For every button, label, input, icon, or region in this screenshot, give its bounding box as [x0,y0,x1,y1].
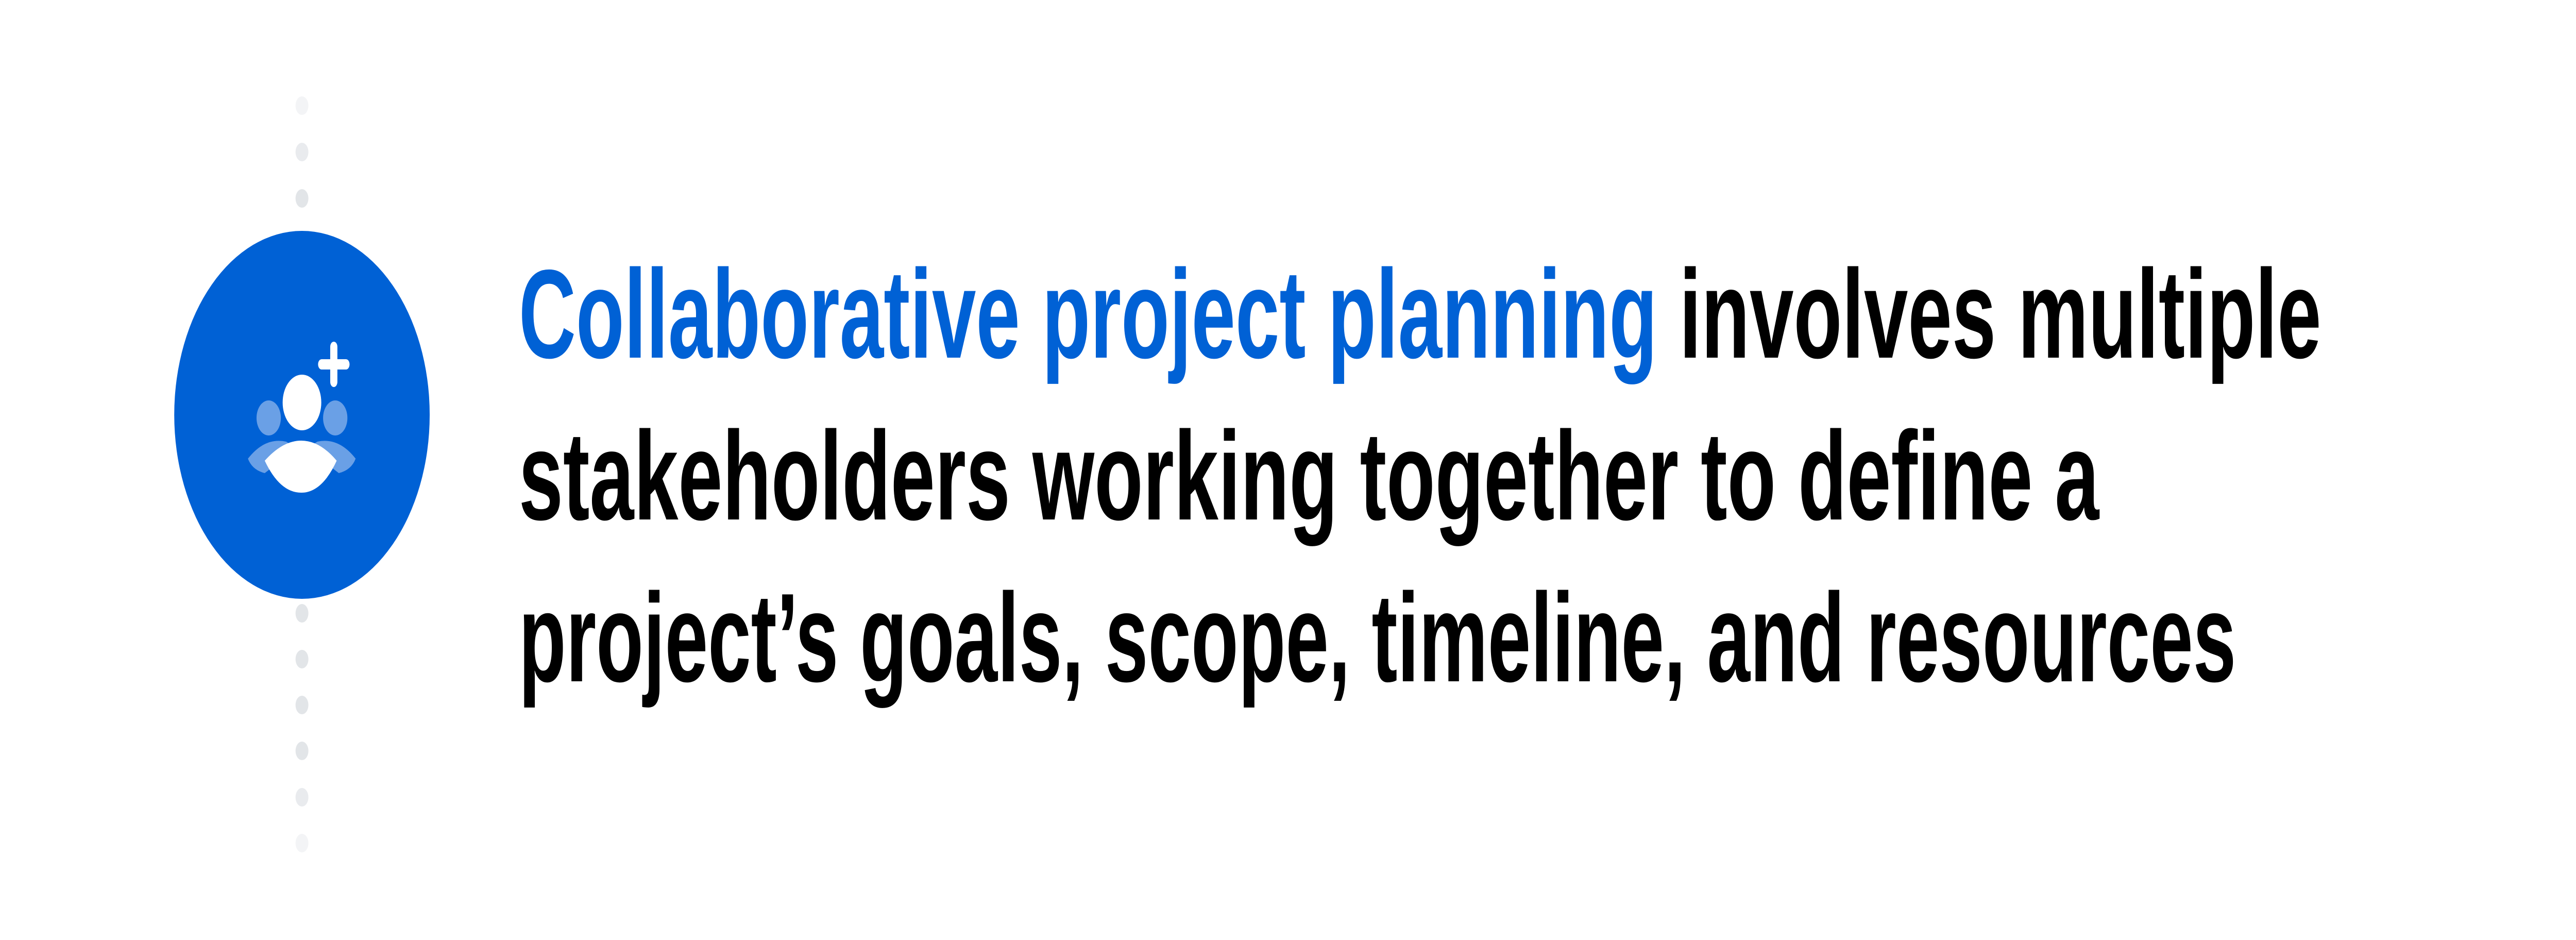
icon: blue circle with collaborators [174,231,430,599]
plus sign [318,342,349,387]
dotted timeline [296,96,309,852]
side people [248,400,355,473]
line 3: project’s goals, scope, timeline, and resources [519,567,2236,708]
line 1: Collaborative project planning involves multiple [519,243,2321,384]
line 2: stakeholders working together to define a [519,405,2100,546]
text block: description [519,243,2321,708]
main person [265,375,336,493]
